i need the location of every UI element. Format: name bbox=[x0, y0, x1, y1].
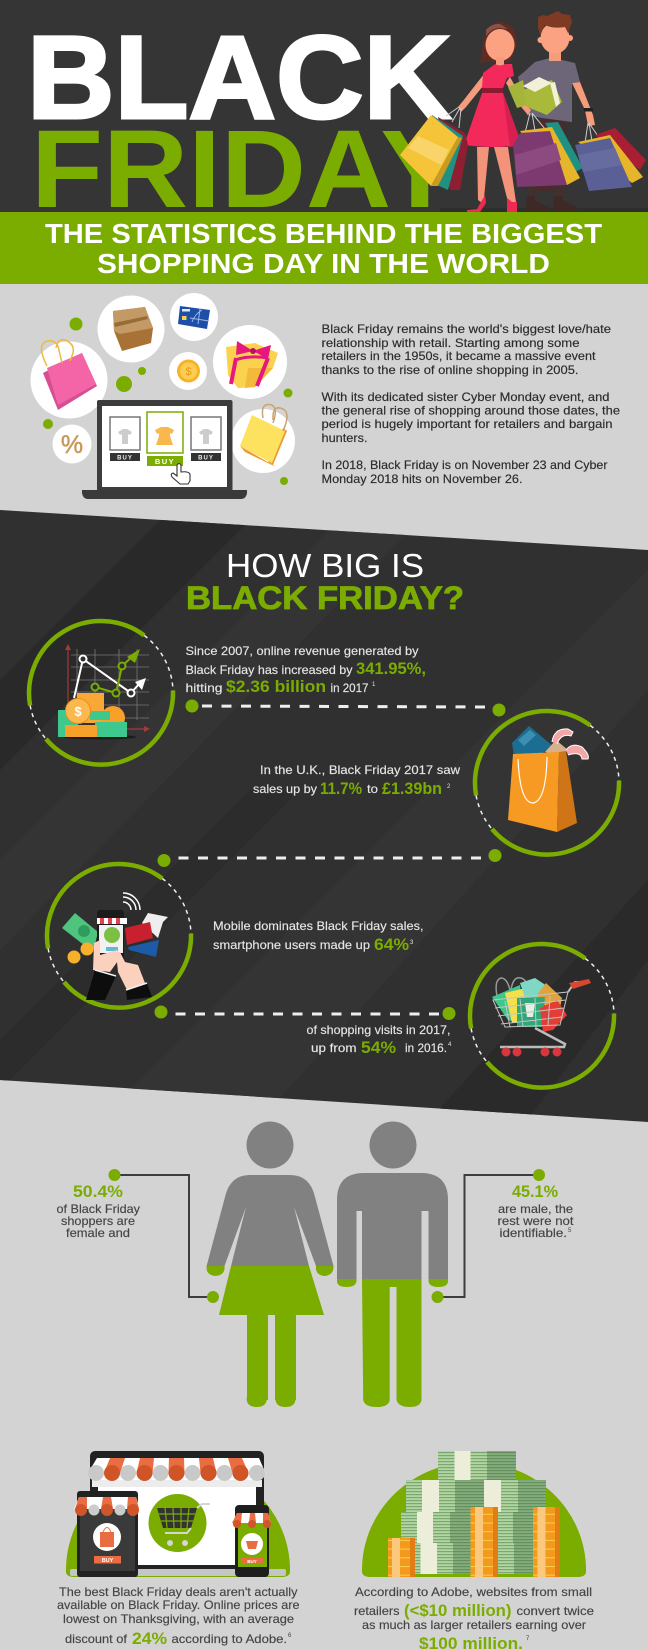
panel: money and coins illustration bbox=[362, 1451, 586, 1577]
text: best deals: according to Adobe. bbox=[172, 1632, 287, 1646]
icon: orange shopping bag bbox=[508, 726, 588, 832]
text: stat 2: to bbox=[367, 782, 378, 796]
subtitle line 1: THE STATISTICS BEHIND THE BIGGEST bbox=[45, 218, 602, 249]
panel: intro text: thanks to the rise of online shopping in 2005. bbox=[322, 363, 578, 377]
text: stat 2: 11.7% bbox=[320, 779, 362, 798]
text: small retailers: 7 bbox=[526, 1636, 530, 1642]
panel: intro text: Black Friday remains the world's biggest love/hate bbox=[322, 322, 611, 336]
icon: revenue chart and coins bbox=[58, 644, 150, 740]
panel: intro text bbox=[322, 322, 620, 486]
text: stat 3: 3 bbox=[410, 940, 414, 946]
text: stat 3: 64% bbox=[374, 935, 409, 954]
coin stacks bbox=[388, 1507, 560, 1577]
text: stat 3: Mobile dominates Black Friday sales, bbox=[213, 919, 424, 933]
callout: female share: of Black Friday bbox=[56, 1202, 140, 1216]
text: stat 1: Since 2007, online revenue generated by bbox=[186, 644, 418, 658]
panel: intro text: With its dedicated sister Cyber Monday event, and bbox=[322, 390, 610, 404]
heading: how big is: HOW BIG IS bbox=[226, 547, 424, 584]
text: stat 3: smartphone users made up bbox=[213, 938, 370, 952]
gift box bbox=[508, 77, 562, 115]
cash stacks bbox=[401, 1451, 546, 1574]
panel: devices storefront illustration bbox=[66, 1451, 290, 1577]
man bbox=[518, 11, 595, 212]
icon: revenue chart and coins: $ bbox=[74, 704, 82, 719]
text: best deals bbox=[57, 1585, 300, 1648]
connector: stat 1 to stat 2 bbox=[186, 700, 506, 716]
shopping bag: purple bbox=[513, 113, 583, 187]
text: stat 1: 341.95%, bbox=[356, 659, 426, 678]
figure: female shopper bbox=[206, 1122, 334, 1407]
icon: percent sign bbox=[52, 424, 92, 464]
figure: male shopper bbox=[337, 1122, 448, 1407]
text: small retailers: convert twice bbox=[516, 1604, 594, 1618]
text: stat 4: 54% bbox=[361, 1038, 396, 1057]
connector: stat 2 to stat 3 bbox=[158, 849, 502, 867]
icon: tablet store bbox=[74, 1491, 140, 1577]
icon: laptop with product cards bbox=[82, 400, 247, 499]
text: stat 2: In the U.K., Black Friday 2017 saw bbox=[260, 763, 460, 777]
text: stat 1: Black Friday has increased by bbox=[186, 663, 352, 677]
text: stat 1: 1 bbox=[372, 682, 376, 688]
callout: male share bbox=[432, 1169, 574, 1303]
callout: female share: 50.4% bbox=[73, 1183, 123, 1201]
title: BLACK: BLACK bbox=[27, 12, 451, 144]
text: stat 3 bbox=[213, 919, 424, 954]
text: stat 4: up from bbox=[311, 1041, 356, 1055]
text: stat 1: in 2017 bbox=[330, 681, 369, 695]
icon: mobile phone shopping bbox=[62, 893, 168, 1000]
text: small retailers bbox=[354, 1585, 594, 1649]
icon: laptop with product cards: BUY bbox=[155, 457, 175, 466]
panel: intro text: relationship with retail. Starting among some bbox=[322, 336, 580, 350]
callout: male share: 5 bbox=[568, 1228, 572, 1234]
panel: intro text: Monday 2018 hits on November 26. bbox=[322, 472, 522, 486]
text: stat 2: £1.39bn bbox=[382, 779, 442, 798]
text: stat 1: $2.36 billion bbox=[226, 677, 326, 696]
text: stat 2 bbox=[253, 763, 460, 798]
text: stat 2: 2 bbox=[447, 784, 451, 790]
panel: intro text: In 2018, Black Friday is on November 23 and Cyber bbox=[322, 458, 608, 472]
callout: male share: identifiable. bbox=[500, 1226, 567, 1240]
callout: female share bbox=[56, 1169, 219, 1303]
text: best deals: The best Black Friday deals aren't actually bbox=[59, 1585, 298, 1599]
text: small retailers: retailers bbox=[354, 1604, 400, 1618]
icon: cardboard box bbox=[98, 296, 164, 362]
icon: percent sign: % bbox=[61, 431, 83, 459]
shopping bag: yellow bbox=[400, 107, 468, 190]
icon: yellow shopping bag bbox=[231, 405, 295, 473]
text: stat 4: in 2016. bbox=[405, 1041, 447, 1055]
callout: male share: are male, the bbox=[498, 1202, 573, 1216]
panel: intro text: period is hugely important for retailers and bargain bbox=[322, 417, 612, 431]
woman bbox=[458, 22, 531, 212]
panel: intro illustration bbox=[30, 293, 295, 499]
awning: laptop storefront bbox=[88, 1458, 266, 1487]
decorative green dots bbox=[43, 318, 292, 485]
connector: stat 3 to stat 4 bbox=[154, 1006, 456, 1020]
icon: shopping cart with bags bbox=[492, 978, 591, 1056]
text: best deals: available on Black Friday. Online prices are bbox=[57, 1598, 300, 1612]
panel: intro text: the general rise of shopping around those dates, the bbox=[322, 404, 620, 418]
text: best deals: 24% bbox=[132, 1629, 167, 1648]
text: best deals: lowest on Thanksgiving, with an average bbox=[63, 1612, 294, 1626]
header panel bbox=[0, 0, 648, 231]
subtitle band bbox=[0, 212, 648, 284]
text: small retailers: According to Adobe, websites from small bbox=[355, 1585, 592, 1599]
icon: credit card bbox=[170, 293, 218, 341]
ring: stat 1 bbox=[29, 621, 173, 765]
text: stat 1: hitting bbox=[186, 681, 222, 695]
callout: male share: 45.1% bbox=[512, 1183, 558, 1201]
text: stat 1 bbox=[186, 644, 426, 696]
icon: tablet store: BUY bbox=[102, 1558, 114, 1564]
title: FRIDAY: FRIDAY bbox=[31, 108, 459, 231]
text: stat 2: sales up by bbox=[253, 782, 317, 796]
text: stat 4: of shopping visits in 2017, bbox=[306, 1023, 450, 1037]
panel: how big is Black Friday bbox=[0, 510, 648, 1130]
panel: intro text: retailers in the 1950s, it became a massive event bbox=[322, 349, 596, 363]
icon: gift box bbox=[213, 325, 287, 399]
heading: Black Friday?: BLACK FRIDAY? bbox=[186, 580, 464, 616]
text: small retailers: as much as larger retailers earning over bbox=[362, 1618, 586, 1632]
icon: laptop with product cards: BUY bbox=[117, 456, 133, 462]
text: best deals: 6 bbox=[288, 1633, 292, 1639]
icon: dollar coin: $ bbox=[185, 366, 192, 378]
callout: female share: shoppers are bbox=[61, 1214, 135, 1228]
ring: stat 3 bbox=[47, 864, 191, 1008]
text: small retailers: (<$10 million) bbox=[404, 1601, 512, 1620]
icon: phone store: BUY bbox=[247, 1559, 257, 1564]
text: stat 4: 4 bbox=[448, 1042, 452, 1048]
subtitle line 2: SHOPPING DAY IN THE WORLD bbox=[97, 248, 550, 279]
icon: laptop with product cards: BUY bbox=[198, 456, 214, 462]
illustration: shopping couple bbox=[400, 11, 648, 213]
ring: stat 2 bbox=[475, 711, 619, 855]
panel: intro text: hunters. bbox=[322, 431, 368, 445]
icon: pointer hand bbox=[171, 464, 190, 484]
callout: male share: rest were not bbox=[498, 1214, 574, 1228]
ground shadow bbox=[440, 208, 648, 213]
shopping bag: blue bbox=[575, 123, 646, 191]
icon: dollar coin bbox=[169, 352, 207, 390]
text: best deals: discount of bbox=[65, 1632, 128, 1646]
ring: stat 4 bbox=[470, 944, 614, 1088]
callout: female share: female and bbox=[66, 1226, 130, 1240]
icon: phone store bbox=[232, 1505, 271, 1577]
text: stat 4 bbox=[306, 1023, 452, 1057]
icon: shopping cart in green circle bbox=[148, 1494, 210, 1552]
icon: pink shopping bag bbox=[30, 340, 108, 418]
